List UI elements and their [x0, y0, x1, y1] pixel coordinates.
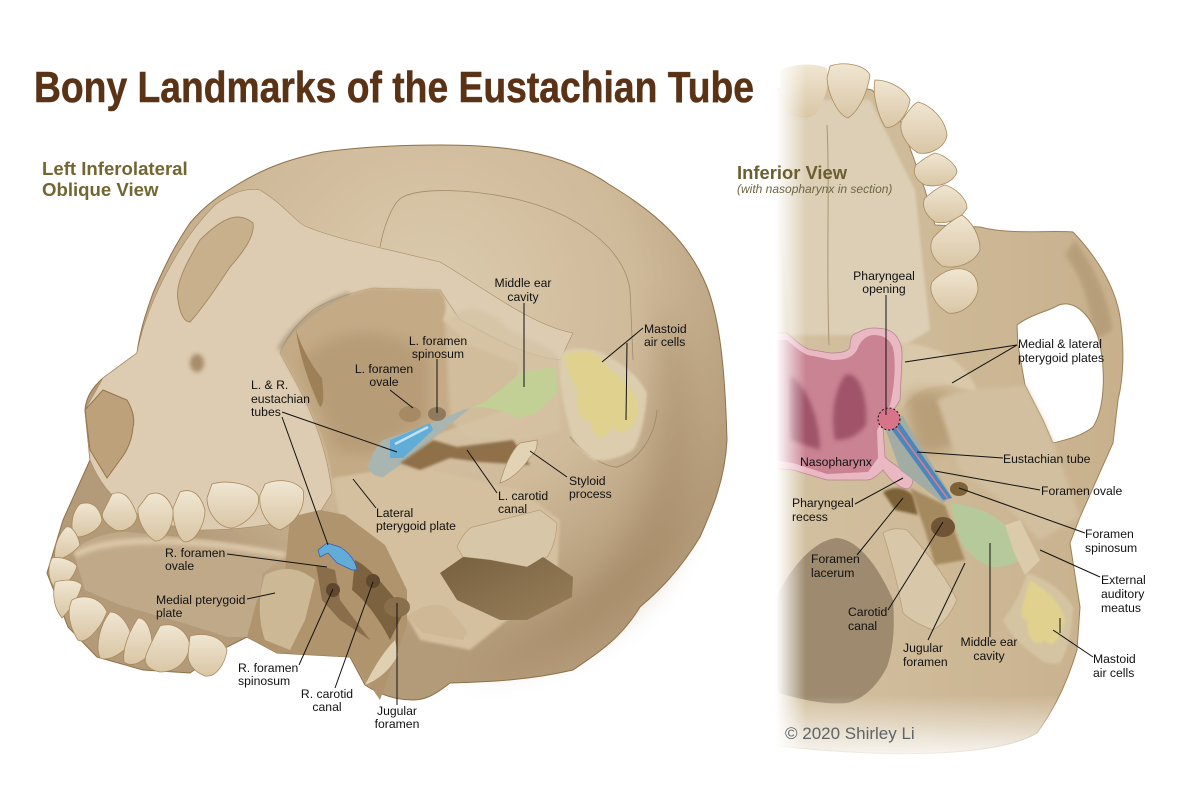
labels: left view: ovale	[369, 375, 399, 389]
left fade	[760, 55, 776, 770]
mastoid process contour	[570, 410, 657, 467]
mastoid air cells	[1003, 573, 1073, 664]
eustachian tube	[892, 423, 952, 500]
labels: right view: Foramen	[1085, 527, 1134, 541]
labels: right view: Carotid	[848, 605, 887, 619]
left styloid process	[500, 440, 537, 483]
infratemporal fossa	[280, 288, 520, 480]
lower and upper teeth	[49, 481, 304, 676]
labels: left view: canal	[312, 700, 342, 714]
labels: right view: pterygoid plates	[1018, 351, 1104, 365]
labels: left view: R. foramen	[165, 546, 225, 560]
labels: left view: air cells	[644, 335, 685, 349]
labels: right view: Nasopharynx	[800, 455, 872, 469]
labels: left view: Mastoid	[644, 322, 687, 336]
jaw window	[1017, 304, 1103, 443]
labels: left view: tubes	[251, 405, 281, 419]
zygomatic inner shading	[1065, 240, 1112, 340]
upper teeth	[780, 64, 980, 313]
nasal aperture	[85, 390, 134, 478]
arch shadow	[280, 295, 350, 350]
labels: left view: spinosum	[238, 674, 290, 688]
labels: left view: process	[569, 487, 612, 501]
labels: left view: Jugular	[377, 704, 417, 718]
heading: inferior view: (with nasopharynx in section)	[737, 182, 892, 196]
left foramen ovale	[399, 406, 421, 422]
skull base light bone	[333, 470, 560, 650]
labels: left view: eustachian	[251, 392, 310, 406]
labels: right view: foramen	[903, 655, 948, 669]
occipital condyle	[883, 529, 957, 630]
labels: right view: Pharyngeal	[792, 496, 854, 510]
occipital condyle right	[407, 605, 467, 640]
pterygomaxillary fissure	[296, 330, 323, 407]
skull silhouette	[47, 145, 727, 700]
labels: left view: pterygoid plate	[376, 519, 456, 533]
fossa shading	[300, 332, 430, 455]
bottom fade	[760, 695, 1100, 765]
labels: left view	[156, 276, 687, 731]
labels: left view: L. foramen	[355, 362, 413, 376]
labels: right view: air cells	[1093, 666, 1134, 680]
labels: left view: Styloid	[569, 474, 606, 488]
petrous apex and carotid region	[400, 440, 530, 470]
sagittal suture	[380, 191, 633, 360]
foramen ovale	[950, 482, 968, 496]
nasopharynx dark folds	[790, 374, 866, 450]
labels: left view: spinosum	[412, 347, 464, 361]
labels: right view: spinosum	[1085, 541, 1137, 555]
fossa shadow	[905, 390, 975, 454]
labels: right view: lacerum	[811, 566, 854, 580]
labels: right view: auditory	[1101, 587, 1145, 601]
external auditory meatus	[1005, 520, 1040, 575]
labels: left view: Middle ear	[495, 276, 551, 290]
infraorbital foramen	[190, 354, 204, 372]
nasopharynx interior	[770, 335, 895, 474]
temporal bone light region	[445, 309, 560, 440]
palate light edge	[75, 541, 285, 555]
right pterygoid and skull base cavities	[247, 510, 410, 700]
labels: right view: canal	[848, 619, 877, 633]
heading: inferior view	[737, 162, 892, 196]
sphenoid region	[937, 385, 1080, 540]
right eustachian tube	[318, 543, 357, 570]
labels: right view: Foramen ovale	[1041, 484, 1123, 498]
labels: left view: Medial pterygoid	[156, 593, 245, 607]
labels: left view: canal	[498, 502, 527, 516]
labels: left view: Lateral	[376, 506, 413, 520]
labels: left view: foramen	[375, 717, 419, 731]
jugular foramen and carotid canal	[931, 517, 955, 537]
title: Bony Landmarks of the Eustachian Tube	[34, 63, 754, 112]
heading: inferior view: Inferior View	[737, 162, 848, 183]
labels: left view: cavity	[507, 290, 539, 304]
labels: left view: L. carotid	[498, 489, 548, 503]
left foramen spinosum	[428, 407, 446, 421]
foramen magnum	[770, 538, 894, 703]
labels: right view: Mastoid	[1093, 652, 1136, 666]
foramen magnum	[440, 557, 573, 620]
middle ear cavity	[470, 367, 558, 418]
eustachian tube sheath	[885, 415, 952, 503]
illustration: left skull	[47, 145, 727, 700]
labels: right view: Eustachian tube	[1003, 452, 1091, 466]
labels: right view: opening	[862, 282, 906, 296]
labels: right view: Pharyngeal	[853, 269, 915, 283]
foramen lacerum shadow	[883, 488, 918, 515]
palate	[73, 532, 290, 637]
labels: left view: L. foramen	[409, 334, 467, 348]
cranium rear shading	[470, 300, 693, 675]
copyright: © 2020 Shirley Li	[785, 724, 915, 743]
orbit recess	[177, 217, 253, 322]
mastoid air cells	[559, 349, 647, 461]
labels: right view: meatus	[1101, 601, 1141, 615]
labels: right view: Foramen	[811, 552, 860, 566]
labels: left view: ovale	[165, 559, 194, 573]
labels: right view: External	[1101, 573, 1146, 587]
labels: right view	[792, 269, 1146, 680]
skull base silhouette	[770, 80, 1123, 754]
occipital condyle left	[457, 510, 557, 567]
palate fade	[776, 55, 806, 770]
labels: right view: recess	[792, 510, 828, 524]
labels: right view: cavity	[973, 649, 1005, 663]
heading: left inferolateral oblique view: Left Inferolateral	[42, 158, 188, 179]
heading: left inferolateral oblique view: Oblique View	[42, 179, 159, 200]
nasopharynx wall	[770, 328, 913, 489]
brow and maxilla bone	[85, 189, 573, 530]
labels: right view: Middle ear	[961, 635, 1017, 649]
palate	[770, 100, 930, 345]
labels: left view: R. carotid	[301, 687, 353, 701]
left eustachian tube	[368, 408, 470, 477]
labels: right view: Jugular	[903, 641, 943, 655]
labels: left view: L. & R.	[251, 378, 288, 392]
petrous bone	[910, 488, 965, 565]
labels: right view: Medial & lateral	[1018, 337, 1102, 351]
palatal suture	[827, 125, 829, 345]
labels: left view: plate	[156, 606, 183, 620]
labels: left view: R. foramen	[238, 661, 298, 675]
illustration: right skull inferior view	[760, 55, 1123, 770]
middle ear cavity	[950, 503, 1020, 567]
pharyngeal opening	[878, 408, 900, 430]
pterygoid plates	[900, 343, 977, 410]
leader lines	[227, 295, 1100, 705]
